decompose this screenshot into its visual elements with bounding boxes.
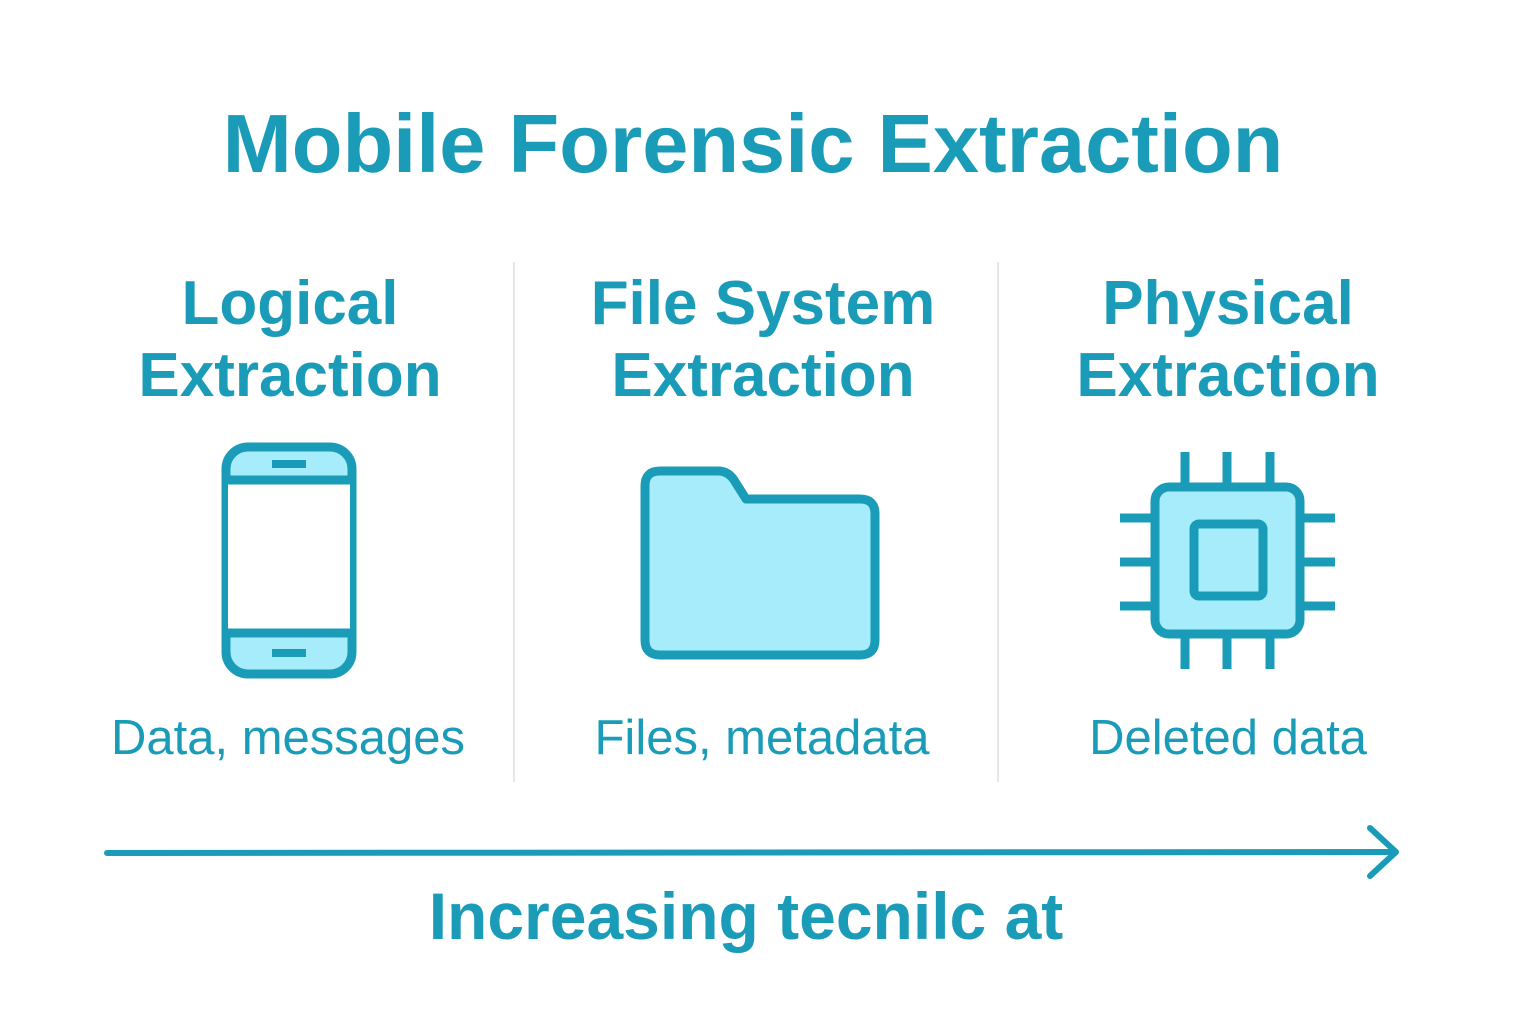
- heading: file system: Extraction: [611, 341, 915, 410]
- heading: physical: Extraction: [1076, 341, 1380, 410]
- heading: logical: [138, 269, 442, 410]
- heading: physical: Physical: [1102, 269, 1354, 338]
- heading: physical: [1076, 269, 1380, 410]
- caption: physical: Deleted data: [1089, 711, 1367, 765]
- icon: folder: [645, 471, 875, 655]
- heading: logical: Logical: [181, 269, 399, 338]
- caption: file system: Files, metadata: [594, 711, 930, 765]
- heading: file system: [591, 269, 935, 410]
- title: Mobile Forensic Extraction: [223, 97, 1283, 190]
- icon: chip: [1120, 452, 1335, 669]
- caption: logical: Data, messages: [111, 711, 465, 765]
- icon: phone: [226, 447, 352, 674]
- heading: logical: Extraction: [138, 341, 442, 410]
- bottom label: Increasing tecnilc at: [429, 879, 1063, 953]
- arrow: [107, 828, 1396, 876]
- heading: file system: File System: [591, 269, 935, 338]
